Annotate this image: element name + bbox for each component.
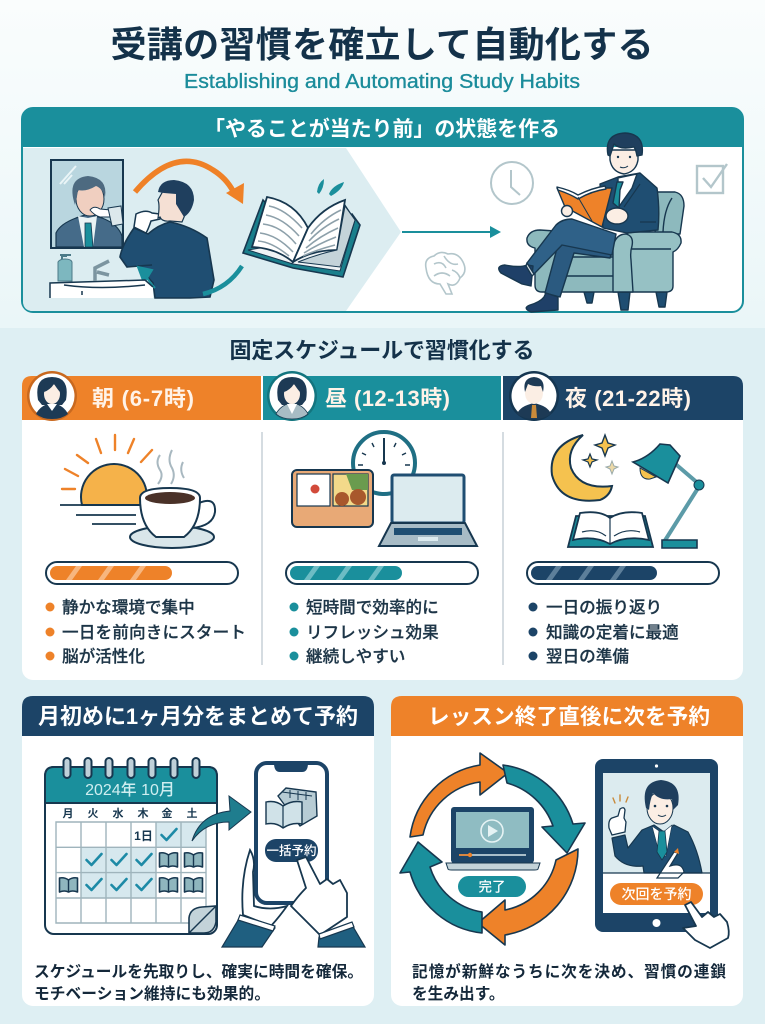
list: noon: 継続しやすい [306,647,405,666]
panel heading: 「やることが当たり前」の状態を作る [204,117,560,141]
icon: moon and stars [552,435,618,501]
monthly description: スケジュールを先取りし、確実に時間を確保。 [34,962,363,981]
monthly description: モチベーション維持にも効果的。 [34,985,270,1003]
illustration: laptop with video [446,807,540,870]
lesson description: を生み出す。 [412,985,505,1003]
icon: checkbox [697,164,727,193]
illustration: calendar: 月 [62,807,74,820]
progress bar: noon [286,562,478,584]
list: noon: リフレッシュ効果 [306,623,439,642]
button: book next: 次回を予約 [622,886,692,902]
column: noon [263,371,501,666]
badge: done: 完了 [478,880,506,894]
column: night [503,371,743,666]
list: morning: 静かな環境で集中 [62,598,195,617]
monthly header [22,696,374,736]
night header: 夜 (21-22時) [565,386,691,411]
panel: habit state [22,108,743,312]
illustration: mirror with reflection [51,160,123,248]
list: morning: 脳が活性化 [62,646,145,666]
panel: book right after lesson [391,696,743,1006]
icon: clock [491,162,533,204]
illustration: man reading in armchair [499,133,684,312]
list: night: 翌日の準備 [546,647,629,666]
arrow [402,226,501,238]
illustration: calendar: 木 [138,806,148,820]
badge: done [458,876,526,897]
night header [503,376,743,420]
lesson heading: レッスン終了直後に次を予約 [428,705,710,729]
morning header: 朝 (6-7時) [92,386,194,411]
icon: teal cycle arrow [138,266,242,294]
avatar: noon [267,371,317,421]
illustration: calendar [45,758,217,934]
noon header [263,376,501,420]
title: 受講の習慣を確立して自動化する [110,24,654,65]
progress bar: morning [46,562,238,584]
panel header bar [22,108,743,147]
section heading: 固定スケジュールで習慣化する [230,338,534,363]
list: morning: 一日を前向きにスタート [62,623,246,642]
illustration: hands and sleeves [222,850,365,947]
list: night: 一日の振り返り [546,598,662,617]
icon: coffee cup [130,450,215,548]
illustration: phone [256,763,327,903]
icon: orange cycle arrow [135,161,244,204]
panel: monthly booking [22,696,374,1006]
illustration: calendar: 水 [112,806,124,820]
illustration: calendar: 土 [186,806,198,820]
illustration: calendar: 火 [88,807,98,820]
illustration: person brushing teeth [120,180,214,298]
list: morning [46,598,246,666]
list: night: 知識の定着に最適 [546,623,679,642]
chevron background [23,148,401,311]
icon: open book [568,512,653,547]
list: noon: 短時間で効率的に [306,598,439,617]
progress bar: night [527,562,719,584]
avatar: night [509,371,559,421]
illustration: calendar: 2024年 10月 [85,781,175,799]
illustration: phone: 一括予約 [266,843,317,858]
list: noon [290,598,439,666]
panel: fixed schedule [22,371,743,680]
button: book next [610,883,703,905]
monthly description [34,962,363,1003]
noon header: 昼 (12-13時) [325,386,450,411]
arrow: calendar to phone [192,796,251,841]
icon: desk lamp [633,444,704,548]
icon: cycle arrows [400,753,585,945]
list: night [528,598,679,666]
icon: wall clock [353,432,415,494]
lesson description: 記憶が新鮮なうちに次を決め、習慣の連鎖 [412,962,726,981]
illustration: sink and soap [50,255,153,298]
icon: laptop [379,475,477,546]
icon: pointing hand [683,902,729,948]
avatar: morning [27,371,77,421]
icon: brain [426,252,465,294]
lesson header [391,696,743,736]
illustration: open book [243,179,360,277]
illustration: calendar: 1日 [134,829,153,843]
illustration: tablet with instructor [595,759,718,932]
monthly heading: 月初めに1ヶ月分をまとめて予約 [38,704,358,729]
lesson description [412,962,726,1003]
illustration: calendar: 金 [162,806,172,820]
icon: sunrise [60,435,152,524]
column: morning [22,371,261,666]
icon: bento box [292,470,373,527]
morning header [22,376,261,420]
subtitle: Establishing and Automating Study Habits [184,71,580,93]
